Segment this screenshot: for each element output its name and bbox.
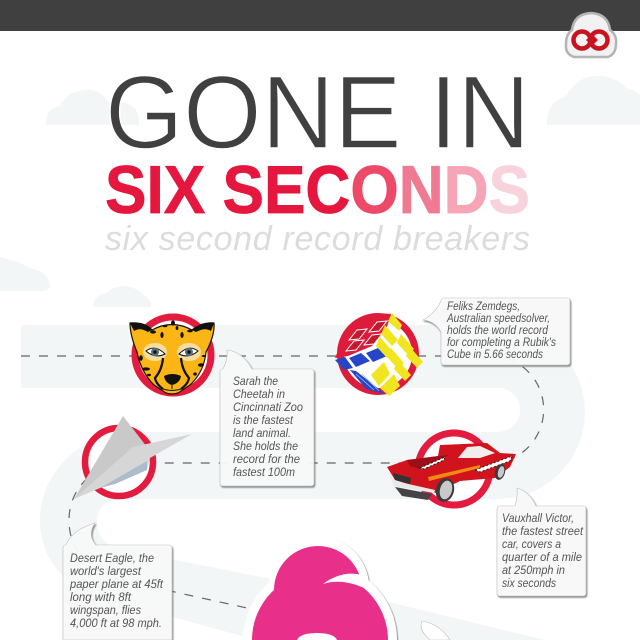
callout: Vauxhall Victor: quarter of a mile: [502, 550, 582, 564]
callout: Sarah the Cheetah: is the fastest: [233, 413, 294, 427]
callout: Feliks Zemdegs: Cube in 5.66 seconds: [447, 347, 543, 361]
callout: Vauxhall Victor: six seconds: [502, 576, 556, 590]
callout: Desert Eagle: world's largest: [70, 564, 142, 578]
callout: Sarah the Cheetah: land animal.: [233, 426, 291, 440]
icon: cheetah: [130, 317, 214, 394]
dashed route: [21, 356, 544, 608]
callout: Desert Eagle: long with 8ft: [70, 590, 132, 604]
callout: Vauxhall Victor: Vauxhall Victor,: [502, 511, 574, 525]
callout: Desert Eagle: [63, 523, 172, 640]
callout: Feliks Zemdegs: Feliks Zemdegs,: [447, 299, 520, 313]
logo: cloud badge: [566, 13, 616, 57]
icon: pink cloud: [243, 537, 397, 640]
callout: Sarah the Cheetah: Cheetah in: [233, 387, 285, 401]
callout: Desert Eagle: 4,000 ft at 98 mph.: [70, 616, 162, 630]
top bar: [0, 0, 640, 31]
callout: Vauxhall Victor: car, covers a: [502, 537, 561, 551]
callout: partial lower tail: [421, 621, 450, 640]
title: gone in: GONE IN: [105, 55, 530, 171]
callout: Sarah the Cheetah: Cincinnati Zoo: [233, 400, 303, 414]
callout: Vauxhall Victor: [497, 488, 586, 596]
icon: paper plane: [74, 416, 192, 499]
callout: Vauxhall Victor: at 250mph in: [502, 563, 565, 577]
icon: rubik's cube: [335, 313, 423, 396]
callout: Desert Eagle: paper plane at 45ft: [69, 577, 164, 591]
callout: Sarah the Cheetah: [220, 350, 314, 486]
callout: Desert Eagle: Desert Eagle, the: [70, 551, 154, 565]
background clouds: [0, 76, 640, 307]
callout: Feliks Zemdegs: [423, 298, 570, 365]
callout: Feliks Zemdegs: holds the world record: [447, 323, 548, 337]
callout: Feliks Zemdegs: Australian speedsolver,: [446, 311, 550, 325]
road track: [21, 325, 585, 640]
callout: Sarah the Cheetah: record for the: [233, 452, 300, 466]
callout: Sarah the Cheetah: fastest 100m: [233, 465, 295, 479]
callout: Feliks Zemdegs: for completing a Rubik's: [447, 335, 556, 349]
callout: Sarah the Cheetah: She holds the: [233, 439, 298, 453]
title: six seconds: SIX SECONDS: [105, 152, 530, 228]
callout: Vauxhall Victor: the fastest street: [502, 524, 584, 538]
callout: Desert Eagle: wingspan, flies: [70, 603, 141, 617]
subtitle: six second record breakers: [105, 220, 530, 258]
callout: Sarah the Cheetah: Sarah the: [233, 374, 278, 388]
icon: red car: [387, 433, 516, 505]
